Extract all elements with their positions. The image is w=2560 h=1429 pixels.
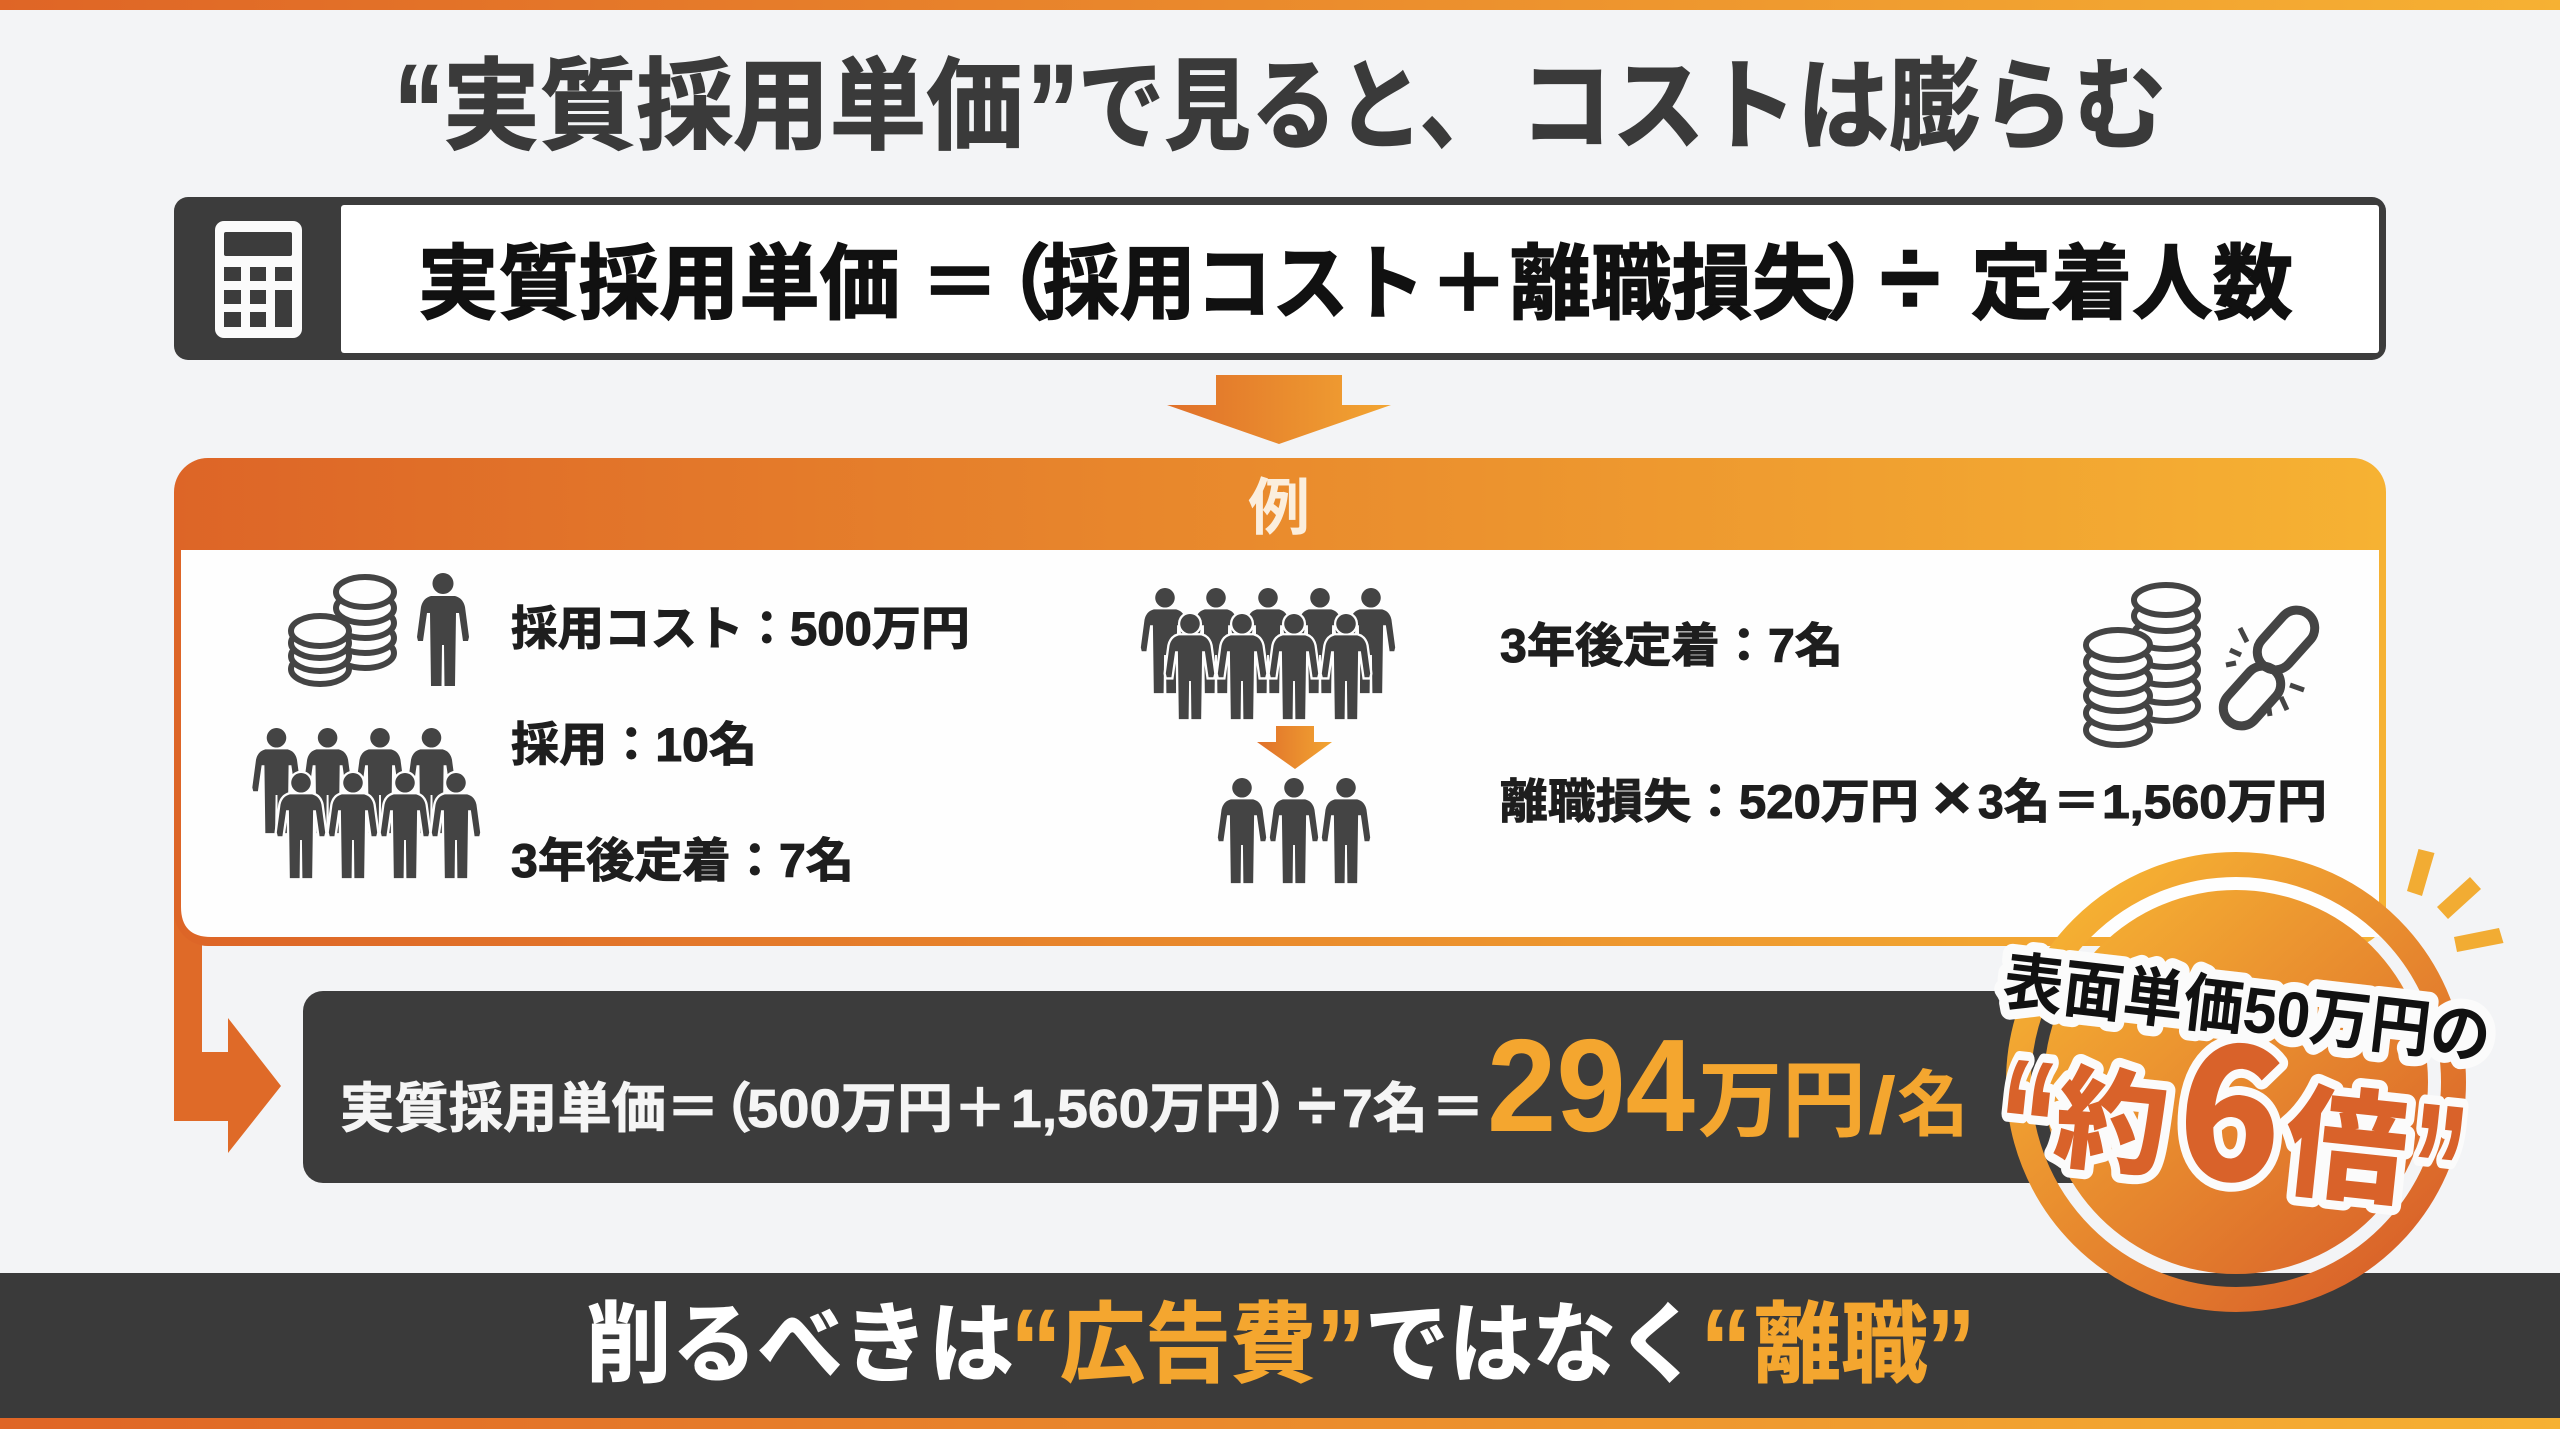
formula text: ） (1825, 239, 1907, 330)
text: left conditions: 採用：10名 (511, 718, 757, 771)
badge: about 6 times (1986, 849, 2504, 1300)
text: left conditions: 500万円 (790, 602, 970, 655)
result value: 万円 (1698, 1054, 1866, 1148)
icon: coins and person (291, 573, 469, 686)
top accent bar (0, 0, 2560, 10)
text: right conditions (1500, 619, 2327, 831)
arrow: example to result (174, 880, 281, 1153)
text: right conditions: ＝ (2053, 775, 2100, 828)
icon: coins and broken chain (2086, 585, 2322, 745)
text: right conditions: 520万円 (1739, 775, 1919, 828)
result formula: 7名 (1342, 1079, 1428, 1139)
badge multiplier: 6 (2166, 965, 2297, 1238)
banner message: “ (1010, 1287, 1062, 1410)
result value: 294 (1487, 1012, 1695, 1159)
text: right conditions: 3名 (1978, 775, 2050, 828)
result value (1487, 1012, 1969, 1159)
icon: seven remaining from group (1141, 588, 1395, 719)
result formula (340, 1066, 1485, 1144)
result formula: ＝ (666, 1079, 720, 1139)
result formula: （ (698, 1079, 752, 1139)
result formula: 500万円 (747, 1079, 953, 1139)
formula text: （ (969, 239, 1051, 330)
title: で見ると、 (1078, 51, 1506, 163)
badge multiplier (1986, 965, 2476, 1279)
formula text: 採用コスト (1043, 239, 1425, 330)
title (394, 37, 2166, 183)
panel: example (174, 458, 2386, 946)
title: コストは膨らむ (1520, 51, 2166, 163)
badge multiplier: ” (2398, 1063, 2476, 1279)
result bar (303, 991, 2103, 1183)
title: 実質採用単価 (443, 51, 1023, 163)
formula text: ＋ (1429, 240, 1509, 329)
text: left conditions (511, 602, 970, 887)
formula text: ÷ (1880, 216, 1940, 339)
banner message: ” (1316, 1287, 1366, 1410)
text: right conditions: 3年後定着：7名 (1500, 619, 1843, 672)
text: right conditions: 離職損失： (1500, 775, 1739, 828)
result formula: ＝ (1431, 1079, 1485, 1139)
result formula: ） (1260, 1079, 1314, 1139)
text: left conditions: 採用コスト： (511, 602, 790, 655)
formula text (418, 216, 2293, 339)
result formula: ÷ (1298, 1066, 1336, 1144)
result formula: 1,560万円 (1011, 1079, 1260, 1139)
result formula: 実質採用単価 (340, 1079, 666, 1139)
formula text: 実質採用単価 (418, 239, 900, 330)
banner message: ” (1926, 1287, 1976, 1410)
formula text: 定着人数 (1971, 239, 2293, 330)
formula bar (174, 197, 2386, 360)
badge multiplier: 約 (2049, 1056, 2174, 1192)
title: “ (394, 37, 444, 183)
banner message: “ (1700, 1287, 1752, 1410)
banner message: 広告費 (1060, 1295, 1316, 1394)
result formula: ＋ (953, 1079, 1007, 1139)
badge multiplier: 倍 (2278, 1074, 2414, 1222)
arrow: formula to example (1167, 375, 1391, 444)
result value: / (1868, 1061, 1896, 1150)
bottom banner (0, 1273, 2560, 1429)
banner message: ではなく (1365, 1295, 1700, 1394)
formula text: 離職損失 (1510, 239, 1833, 330)
badge multiplier: “ (1986, 1018, 2066, 1235)
title: ” (1027, 37, 1079, 183)
text: right conditions: × (1933, 764, 1971, 831)
text: right conditions: 1,560万円 (2102, 775, 2327, 828)
badge caption: 表面単価50万円の (1999, 945, 2494, 1073)
arrow: down to leavers (1257, 726, 1332, 769)
result value: 名 (1897, 1066, 1969, 1146)
formula text: ＝ (920, 240, 1000, 329)
icon: three leavers (1218, 778, 1370, 883)
icon: calculator (215, 221, 302, 338)
banner message: 離職 (1754, 1295, 1928, 1394)
burst rays (2407, 849, 2504, 952)
text: left conditions: 3年後定着：7名 (511, 834, 854, 887)
panel heading: 例 (1248, 474, 1310, 543)
banner message: 削るべきは (586, 1295, 1014, 1394)
banner message (586, 1287, 1976, 1410)
icon: group of hires (252, 728, 480, 878)
